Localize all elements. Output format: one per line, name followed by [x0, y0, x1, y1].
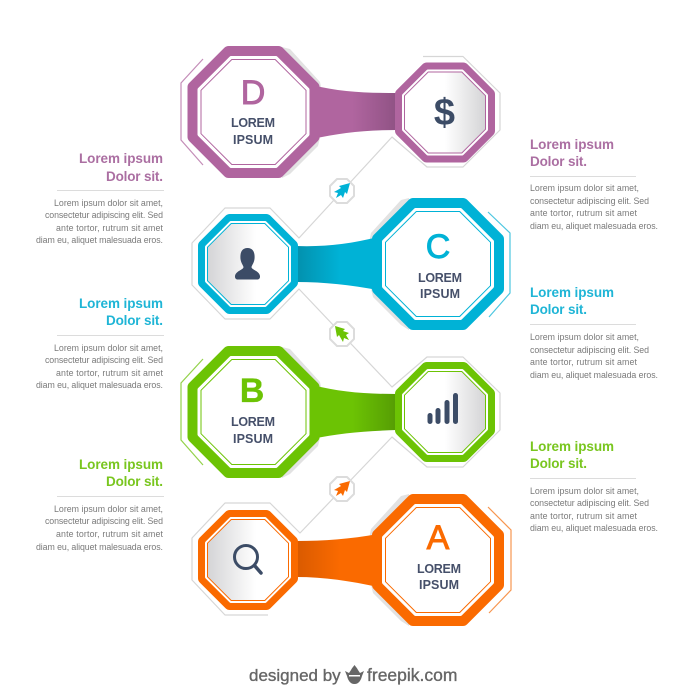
text block: right green: [530, 439, 658, 533]
large octagon B: [194, 352, 314, 472]
text block: right purple: consectetur adipiscing elit. Sed: [530, 196, 649, 206]
label B: [231, 415, 275, 446]
label A: [417, 562, 461, 592]
text block: left cyan: diam eu, aliquet malesuada eros.: [36, 380, 163, 390]
text block: left purple: consectetur adipiscing elit. Sed: [45, 210, 163, 220]
text block: right green: consectetur adipiscing elit. Sed: [530, 498, 649, 508]
text block: left green: [36, 457, 164, 552]
text block: left cyan: [36, 296, 164, 390]
arrow node 2: [330, 322, 354, 346]
label B: LOREM: [231, 415, 275, 429]
small octagon D: [401, 68, 489, 156]
unit A: orange: [204, 494, 511, 626]
shadow A: [369, 494, 409, 626]
label A: LOREM: [417, 562, 461, 576]
text block: left purple: diam eu, aliquet malesuada eros.: [36, 235, 163, 245]
connector lines and grey outlines: [192, 56, 500, 615]
label D: IPSUM: [233, 133, 273, 147]
shadow B: [282, 347, 322, 478]
text block: right green: Lorem ipsum dolor sit amet,: [530, 486, 639, 496]
icon: dollar: $: [434, 92, 455, 134]
text block: left cyan: Dolor sit.: [106, 313, 163, 328]
text block: right purple: diam eu, aliquet malesuada eros.: [530, 221, 658, 231]
text block: left purple: ante tortor, rutrum sit amet: [56, 223, 164, 233]
connector band B: [312, 385, 397, 439]
small octagon A: [204, 516, 292, 604]
icon: bar chart: [428, 393, 458, 424]
text block: left green: Dolor sit.: [106, 474, 163, 489]
arrow node 1: [330, 179, 354, 203]
text block: left green: diam eu, aliquet malesuada eros.: [36, 542, 163, 552]
text block: right purple: Lorem ipsum dolor sit amet,: [530, 183, 639, 193]
text block: right green: diam eu, aliquet malesuada eros.: [530, 523, 658, 533]
text block: right cyan: Lorem ipsum: [530, 285, 614, 300]
unit D: purple: [181, 47, 489, 178]
text block: right purple: ante tortor, rutrum sit amet: [530, 208, 638, 218]
accent outline A: [488, 507, 511, 613]
large octagon A: [378, 500, 498, 620]
text block: right green: Dolor sit.: [530, 456, 587, 471]
large octagon C: [378, 204, 498, 324]
text block: right cyan: diam eu, aliquet malesuada eros.: [530, 370, 658, 380]
text block: right green: Lorem ipsum: [530, 439, 614, 454]
text block: left green: Lorem ipsum: [79, 457, 163, 472]
letter D: D: [241, 74, 265, 112]
label A: IPSUM: [419, 578, 459, 592]
label D: [231, 116, 275, 147]
text block: right purple: [530, 137, 658, 231]
accent outline D: [181, 59, 203, 165]
text block: left green: consectetur adipiscing elit. Sed: [45, 516, 163, 526]
text block: right cyan: [530, 285, 658, 380]
text block: right cyan: Lorem ipsum dolor sit amet,: [530, 332, 639, 342]
text block: right purple: Lorem ipsum: [530, 137, 614, 152]
text block: left purple: [36, 151, 164, 245]
text block: left cyan: consectetur adipiscing elit. Sed: [45, 355, 163, 365]
accent outline C: [488, 212, 510, 317]
text block: left purple: Lorem ipsum: [79, 151, 163, 166]
icon: person: [235, 248, 260, 280]
label C: IPSUM: [420, 287, 460, 301]
label D: LOREM: [231, 116, 275, 130]
footer credit: designed by: [249, 666, 341, 685]
text block: left purple: Lorem ipsum dolor sit amet,: [54, 198, 163, 208]
text block: left green: Lorem ipsum dolor sit amet,: [54, 504, 163, 514]
letter B: B: [240, 372, 264, 410]
text block: right cyan: Dolor sit.: [530, 302, 587, 317]
text block: left cyan: Lorem ipsum dolor sit amet,: [54, 343, 163, 353]
text block: left green: ante tortor, rutrum sit amet: [56, 529, 164, 539]
arrow node 3: [330, 477, 354, 501]
large octagon D: [194, 52, 314, 172]
connector band D: [312, 85, 397, 139]
text block: right green: ante tortor, rutrum sit amet: [530, 511, 638, 521]
accent outline B: [181, 359, 203, 465]
small octagon C: [204, 220, 292, 308]
label B: IPSUM: [233, 432, 273, 446]
shadow D: [282, 47, 322, 178]
connector band A: [296, 534, 378, 587]
small octagon B: [401, 368, 489, 456]
text block: right cyan: consectetur adipiscing elit. Sed: [530, 345, 649, 355]
icon: freepik logo: [345, 665, 364, 684]
shadow C: [369, 198, 409, 330]
footer credit: [249, 665, 457, 685]
connector band C: [296, 237, 378, 290]
icon: magnifier: [234, 546, 261, 573]
text block: left purple: Dolor sit.: [106, 169, 163, 184]
unit B: green: [181, 347, 489, 478]
text block: right cyan: ante tortor, rutrum sit amet: [530, 357, 638, 367]
label C: LOREM: [418, 271, 462, 285]
letter A: A: [427, 519, 450, 557]
text block: right purple: Dolor sit.: [530, 154, 587, 169]
footer credit: freepik.com: [367, 665, 457, 685]
label C: [418, 271, 462, 301]
text block: left cyan: ante tortor, rutrum sit amet: [56, 368, 164, 378]
unit C: cyan: [204, 198, 510, 330]
text block: left cyan: Lorem ipsum: [79, 296, 163, 311]
letter C: C: [426, 228, 450, 266]
